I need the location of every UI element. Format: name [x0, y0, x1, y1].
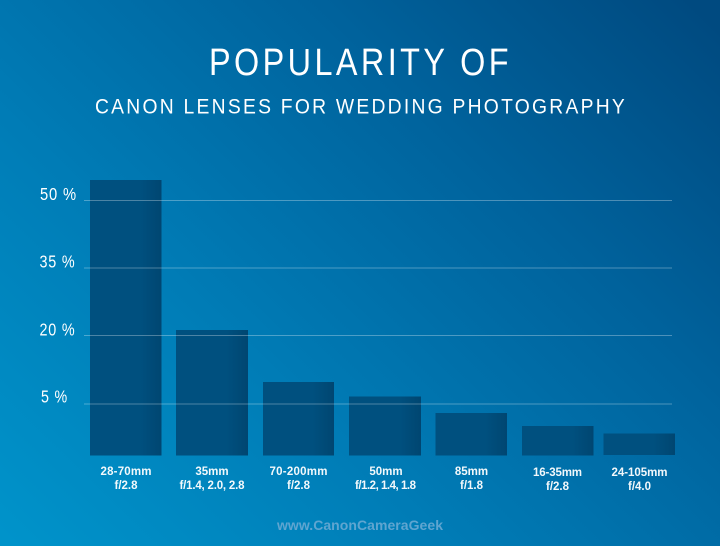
bar: 70-200mm — [263, 382, 334, 456]
y axis labels: 50 % — [40, 184, 77, 204]
y axis labels: 5 % — [41, 386, 68, 406]
x axis labels: 35mm — [195, 466, 229, 478]
x axis labels: f/2.8 — [287, 480, 311, 492]
x axis labels — [100, 466, 668, 493]
x axis labels: f/1.8 — [460, 480, 484, 492]
bar: 16-35mm — [522, 426, 594, 456]
x axis labels: f/1.4, 2.0, 2.8 — [180, 480, 245, 492]
x axis labels: 16-35mm — [533, 467, 582, 479]
x axis labels: f/2.8 — [546, 481, 570, 493]
bar: 35mm — [176, 330, 248, 456]
bar: 85mm — [436, 413, 507, 456]
bar: 28-70mm — [90, 180, 162, 456]
y axis labels: 20 % — [40, 320, 76, 340]
bar chart — [40, 180, 675, 493]
x axis labels: 70-200mm — [270, 466, 328, 478]
x axis labels: 85mm — [455, 466, 488, 478]
bar: 50mm — [349, 396, 421, 456]
title: POPULARITY OF — [209, 42, 512, 84]
grid lines — [84, 200, 672, 404]
x axis labels: f/1.2, 1.4, 1.8 — [355, 480, 417, 492]
y axis labels — [40, 184, 77, 406]
x axis labels: f/2.8 — [114, 480, 138, 492]
x axis labels: f/4.0 — [628, 481, 651, 493]
subtitle: CANON LENSES FOR WEDDING PHOTOGRAPHY — [95, 94, 627, 118]
x axis labels: 50mm — [369, 466, 403, 478]
y axis labels: 35 % — [40, 252, 76, 272]
x axis labels: 24-105mm — [612, 467, 668, 479]
x axis labels: 28-70mm — [100, 466, 152, 478]
website credit: www.CanonCameraGeek — [276, 517, 443, 533]
bar: 24-105mm — [604, 434, 675, 455]
